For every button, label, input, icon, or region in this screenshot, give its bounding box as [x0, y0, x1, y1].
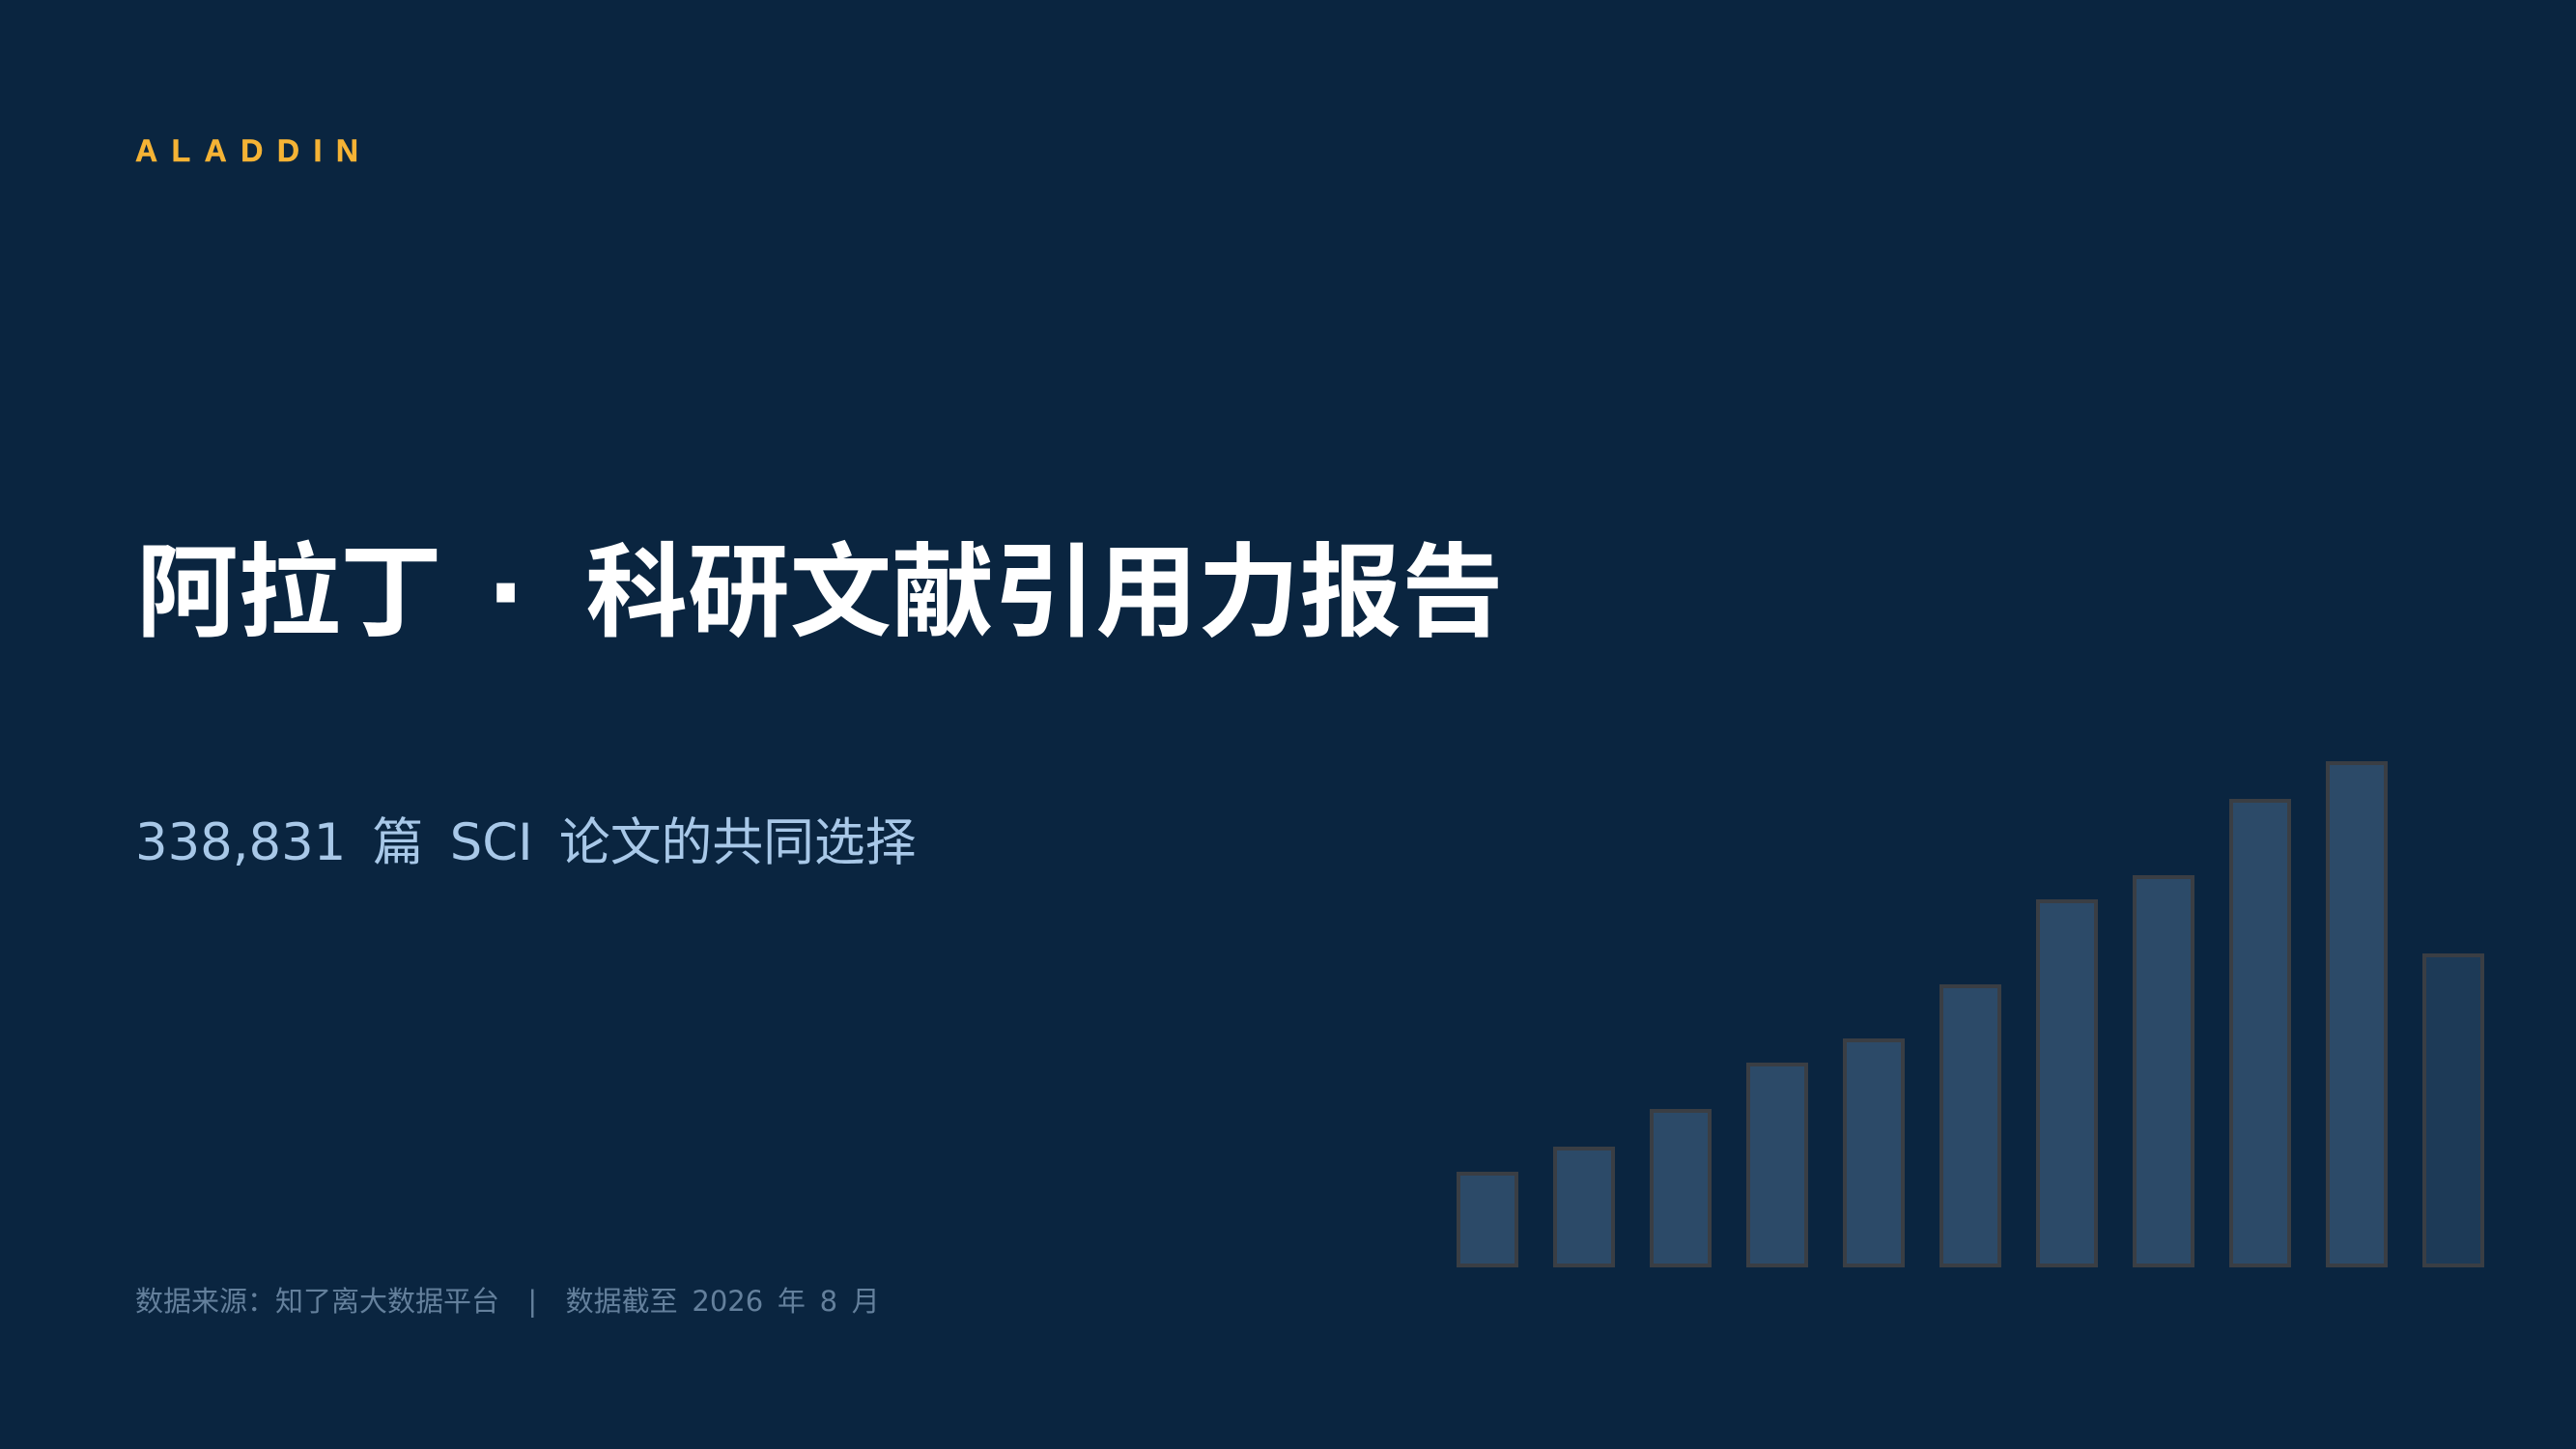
brand label: ALADDIN — [135, 133, 372, 168]
footer source note: 数据来源：知了离大数据平台 | 数据截至 2026 年 8 月 — [135, 1285, 880, 1318]
title: 阿拉丁 · 科研文献引用力报告 — [136, 533, 1504, 652]
subtitle: 338,831 篇 SCI 论文的共同选择 — [135, 813, 917, 872]
